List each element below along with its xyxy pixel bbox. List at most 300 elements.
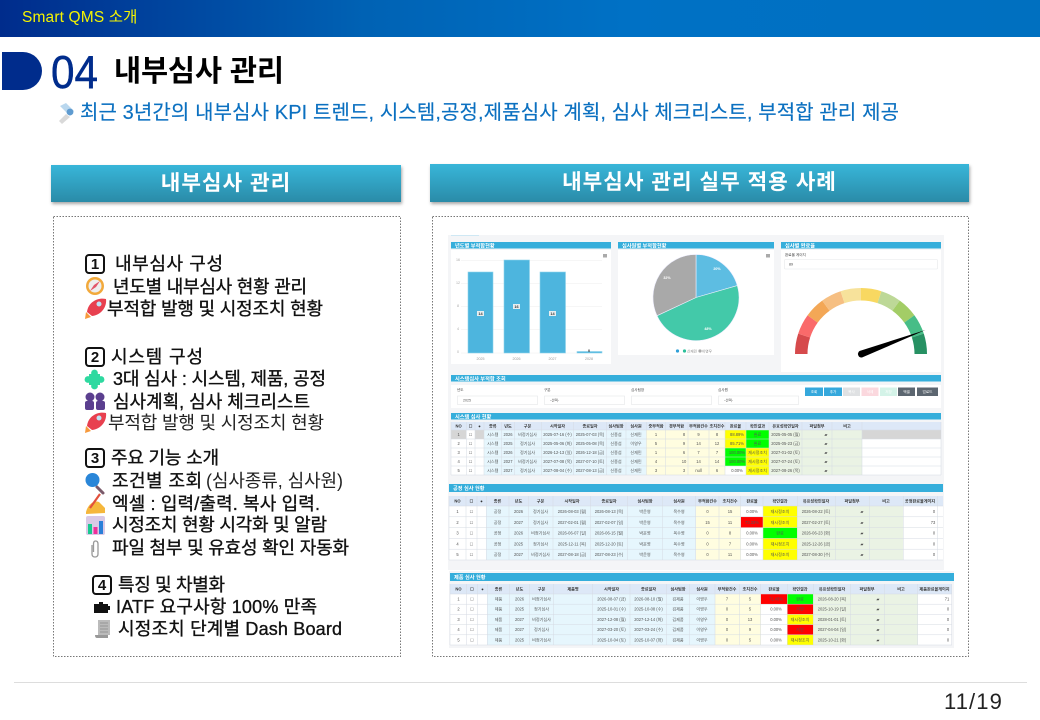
table: process audit status: 박운영 bbox=[639, 508, 651, 514]
table: system audit status: 14 bbox=[696, 459, 701, 464]
table: process audit status: 심사원 bbox=[673, 498, 685, 504]
search filter section: 2025 bbox=[463, 398, 471, 402]
search filter section: 저장 bbox=[885, 389, 892, 394]
search filter section: 년도 bbox=[457, 387, 464, 392]
table: process audit status: 종료일자 bbox=[601, 498, 617, 504]
table: system audit status: 2027-07-08 (목) bbox=[543, 459, 572, 464]
table: product audit status: 5 bbox=[749, 637, 752, 642]
table: process audit status: 2027-08-30 (수) bbox=[802, 551, 831, 557]
table: process audit status: ▰ bbox=[860, 509, 864, 514]
table: process audit status: 4 bbox=[456, 541, 459, 546]
table: process audit status: ● bbox=[480, 498, 483, 504]
table: system audit status: 재시정조치 bbox=[748, 458, 767, 464]
table: process audit status: 0 bbox=[933, 531, 936, 536]
table: product audit status: ▰ bbox=[876, 596, 880, 602]
chart: pie by auditor: 32% bbox=[663, 276, 671, 280]
table: product audit status: 재시정조치 bbox=[791, 616, 810, 622]
search filter section: 심사원 bbox=[718, 387, 728, 392]
table: system audit status: 완료율 bbox=[730, 422, 741, 428]
table: product audit status: 제품 bbox=[495, 636, 502, 642]
table: product audit status: 2025 bbox=[515, 637, 525, 642]
table: process audit status: 73 bbox=[931, 520, 936, 525]
table: process audit status: 부적합건수 bbox=[698, 498, 717, 504]
chart: yearly nonconformity bars: 2025 bbox=[476, 357, 484, 361]
table: product audit status: 5 bbox=[749, 596, 752, 602]
table: product audit status: 지연 bbox=[796, 606, 804, 612]
group 2: system composition: 부적합 발행 및 시정조치 현황 bbox=[108, 413, 324, 433]
table: system audit status: 재시정조치 bbox=[748, 449, 767, 455]
table: system audit status: 비정기심사 bbox=[518, 458, 537, 464]
table: system audit status: 비정기심사 bbox=[518, 431, 537, 437]
top header band bbox=[0, 0, 1040, 37]
search filter section: 시스템심사 부적합 조회 bbox=[455, 374, 506, 382]
table: product audit status: 김제품 bbox=[672, 626, 684, 632]
table: product audit status: 2025 bbox=[515, 607, 525, 612]
table: process audit status: 11 bbox=[728, 552, 733, 557]
group 4: features and differentiators bbox=[93, 575, 342, 639]
table: process audit status: ☐ bbox=[470, 498, 474, 504]
table: process audit status: 박운영 bbox=[639, 551, 651, 557]
table: product audit status: 7 bbox=[726, 596, 729, 602]
table: system audit status: 1 bbox=[457, 432, 460, 437]
table: system audit status: 8 bbox=[683, 432, 686, 437]
table: process audit status: 2026-08-03 (월) bbox=[558, 508, 587, 514]
table: product audit status: 이영우 bbox=[696, 636, 708, 642]
table: product audit status: 시작일자 bbox=[604, 586, 619, 592]
table: process audit status: 구분 bbox=[537, 498, 544, 504]
table: product audit status: 71.43% bbox=[769, 596, 783, 602]
table: system audit status: 완료 bbox=[754, 431, 761, 437]
chart: yearly nonconformity bars: 14 bbox=[478, 312, 483, 316]
table: system audit status: 시스템 심사 현황 bbox=[455, 412, 492, 420]
table: product audit status: 2026 bbox=[515, 596, 525, 602]
table: system audit status: 2027 bbox=[503, 468, 513, 473]
table: system audit status: ☐ bbox=[469, 450, 473, 455]
chart: pie by auditor: 20% bbox=[713, 267, 721, 271]
table: product audit status: 9 bbox=[749, 627, 752, 632]
table: system audit status: 100.00% bbox=[729, 450, 745, 455]
table: system audit status: ▰ bbox=[824, 468, 828, 473]
table: process audit status: 2026 bbox=[514, 531, 524, 536]
table: process audit status: 2025-12-11 (목) bbox=[558, 541, 587, 546]
table: system audit status: 2027-08-26 (목) bbox=[771, 468, 800, 473]
table: process audit status: 2027-02-27 (토) bbox=[802, 520, 831, 525]
table: process audit status: 8 bbox=[729, 531, 732, 536]
table: system audit status: 시스템 bbox=[487, 467, 499, 473]
table: system audit status: 부적합건수 bbox=[689, 422, 708, 428]
table: process audit status: 2025 bbox=[514, 541, 524, 546]
table: system audit status: 5 bbox=[655, 441, 658, 446]
table: process audit status: 2 bbox=[456, 520, 459, 525]
table: system audit status: 시작일자 bbox=[550, 422, 565, 428]
table: product audit status: 김제품 bbox=[672, 596, 684, 602]
table: product audit status: 재시정조치 bbox=[791, 636, 810, 642]
table: product audit status: ▰ bbox=[876, 607, 880, 612]
search filter section: 삭제 bbox=[867, 389, 873, 394]
group 3: main functions: 시정조치 현황 시각화 및 알람 bbox=[112, 515, 327, 535]
left panel heading: 내부심사 관리 bbox=[161, 171, 291, 195]
table: system audit status: 종료일자 bbox=[582, 422, 598, 428]
table: process audit status: 0.00% bbox=[746, 531, 758, 536]
table: process audit status: 2026-06-07 (일) bbox=[558, 530, 587, 536]
table: process audit status: 공정 심사 현황 bbox=[453, 484, 485, 492]
table: product audit status: 0 bbox=[726, 637, 729, 642]
search filter section: 업로드 bbox=[923, 389, 933, 394]
table: product audit status: 2025-10-04 (토) bbox=[597, 637, 626, 642]
table: product audit status: 2025-10-08 (수) bbox=[634, 606, 663, 612]
table: system audit status: ● bbox=[478, 424, 481, 428]
chart: yearly nonconformity bars: 16 bbox=[456, 258, 460, 262]
table: system audit status: 2025-07-16 (수) bbox=[543, 431, 572, 437]
table: system audit status: 14 bbox=[715, 459, 720, 464]
table: product audit status: 이영우 bbox=[696, 596, 708, 602]
table: process audit status: 비정기심사 bbox=[531, 551, 550, 557]
table: product audit status: 2027 bbox=[515, 617, 525, 622]
table: product audit status bbox=[449, 571, 954, 648]
table: process audit status: 2027-08-23 (수) bbox=[595, 551, 624, 557]
table: process audit status: 재시정조치 bbox=[771, 508, 790, 514]
table: product audit status: 확인결과 bbox=[792, 586, 808, 592]
table: product audit status: 2028-01-01 (토) bbox=[818, 617, 847, 622]
table: system audit status: 신재민 bbox=[630, 449, 642, 455]
table: process audit status: ☐ bbox=[470, 531, 474, 536]
table: product audit status: 2026-08-10 (월) bbox=[634, 596, 663, 602]
table: product audit status: 김제품 bbox=[672, 616, 684, 622]
table: system audit status: ▰ bbox=[824, 432, 828, 437]
table: process audit status: 공정 bbox=[494, 530, 501, 536]
table: product audit status: ▰ bbox=[876, 637, 880, 642]
table: system audit status: ▰ bbox=[824, 459, 828, 464]
table: product audit status: 심사원 bbox=[696, 586, 708, 592]
table: process audit status: 15 bbox=[728, 509, 733, 514]
table: process audit status: 2026-06-23 (화) bbox=[802, 530, 831, 536]
table: product audit status: 2026-08-20 (목) bbox=[818, 596, 847, 602]
chart: yearly nonconformity bars: 2028 bbox=[585, 357, 593, 361]
table: process audit status: 0 bbox=[706, 509, 709, 514]
table: system audit status: 비고 bbox=[843, 422, 851, 428]
table: system audit status: 85.71% bbox=[730, 441, 744, 446]
table: process audit status: 시작일자 bbox=[564, 498, 580, 504]
table: system audit status: 이영우 bbox=[630, 440, 642, 446]
table: process audit status: ☐ bbox=[470, 520, 474, 525]
group 1: internal audit composition bbox=[85, 254, 323, 319]
group 3: main functions: 파일 첨부 및 유효성 확인 자동화 bbox=[112, 538, 349, 558]
table: system audit status: 중부적합 bbox=[648, 422, 664, 428]
table: system audit status: 2026 bbox=[503, 432, 513, 437]
chart: pie by auditor: 신재민 bbox=[687, 348, 697, 354]
table: product audit status: 유효성확인일자 bbox=[819, 586, 845, 592]
search filter section: 구분 bbox=[544, 387, 551, 392]
table: product audit status: 2027-04-04 (일) bbox=[818, 626, 847, 632]
table: process audit status: 목수영 bbox=[673, 519, 685, 525]
table: system audit status: 5 bbox=[457, 468, 460, 473]
table: process audit status: NO bbox=[454, 498, 461, 504]
group 4: features and differentiators: 특징 및 차별화 bbox=[118, 575, 225, 595]
table: product audit status: 13 bbox=[748, 617, 753, 622]
table: product audit status: 0 bbox=[726, 627, 729, 632]
table: system audit status: 신재민 bbox=[630, 431, 642, 437]
table: product audit status: 2 bbox=[457, 607, 460, 612]
table: product audit status: 파일첨부 bbox=[859, 586, 875, 592]
table: process audit status: 2027-02-07 (일) bbox=[595, 519, 624, 525]
table: process audit status: ▰ bbox=[860, 552, 864, 557]
table: product audit status: 제품 bbox=[495, 596, 502, 602]
group 4: features and differentiators: 시정조치 단계별 Dash Board bbox=[118, 619, 342, 639]
table: product audit status: 조치건수 bbox=[742, 586, 758, 592]
group 1: internal audit composition: 년도별 내부심사 현황 관리 bbox=[113, 277, 307, 297]
table: system audit status: 심사팀장 bbox=[608, 422, 624, 428]
table: system audit status: 3 bbox=[457, 450, 460, 455]
group 3: main functions: (심사종류, 심사원) bbox=[206, 471, 343, 491]
table: system audit status: 8 bbox=[716, 432, 719, 437]
search filter section: 추가 bbox=[830, 389, 837, 394]
table: process audit status: 0 bbox=[933, 541, 936, 546]
chart: completion gauge: 완료율 게이지 bbox=[785, 252, 806, 257]
table: process audit status: 공정 bbox=[494, 540, 501, 546]
table: system audit status: 2025-05-06 (화) bbox=[543, 440, 572, 446]
table: process audit status: 박운영 bbox=[639, 540, 651, 546]
table: system audit status: 100.00% bbox=[729, 459, 745, 464]
table: process audit status: 정기심사 bbox=[533, 508, 548, 514]
table: product audit status: 제품명 bbox=[567, 586, 579, 592]
table: system audit status: 2025-07-03 (목) bbox=[576, 432, 605, 437]
table: process audit status: 73.33% bbox=[745, 520, 759, 525]
table: system audit status: 시스템 bbox=[487, 449, 499, 455]
search filter section: -선택- bbox=[724, 398, 734, 402]
table: product audit status: 2026-08-07 (금) bbox=[597, 596, 626, 602]
table: system audit status: 9 bbox=[683, 441, 686, 446]
table: process audit status: 박운영 bbox=[639, 519, 651, 525]
table: product audit status: 0 bbox=[726, 617, 729, 622]
table: process audit status: 재시정조치 bbox=[771, 540, 790, 546]
table: process audit status: ▰ bbox=[860, 531, 864, 536]
panel: right application example bbox=[432, 216, 969, 657]
table: system audit status: 2027 bbox=[503, 459, 513, 464]
chart: yearly nonconformity bars: 12 bbox=[456, 281, 460, 285]
group 2: system composition: 시스템 구성 bbox=[111, 347, 203, 367]
table: process audit status: 15 bbox=[705, 520, 710, 525]
table: system audit status: ▰ bbox=[824, 441, 828, 446]
table: system audit status: 신종섭 bbox=[610, 467, 622, 473]
table: system audit status: 12 bbox=[715, 441, 720, 446]
group 3: main functions: 주요 기능 소개 bbox=[111, 448, 219, 468]
table: system audit status: 시스템 bbox=[487, 458, 499, 464]
table: system audit status: 2027-08-13 (금) bbox=[576, 468, 605, 473]
group 2: system composition: 2 bbox=[91, 349, 99, 366]
page number: 11/19 bbox=[944, 689, 1003, 714]
table: system audit status: 2 bbox=[457, 441, 460, 446]
search filter section: 복사 bbox=[848, 389, 855, 394]
table: product audit status: 2025-10-19 (일) bbox=[818, 606, 847, 612]
table: process audit status: ▰ bbox=[860, 520, 864, 525]
table: product audit status: 지연 bbox=[796, 626, 804, 632]
table: process audit status: 0 bbox=[933, 552, 936, 557]
table: system audit status: 3 bbox=[683, 468, 686, 473]
table: process audit status: 0 bbox=[933, 509, 936, 514]
table: product audit status: NO bbox=[455, 586, 462, 592]
table: process audit status: 비정기심사 bbox=[531, 530, 550, 536]
group 3: main functions: 3 bbox=[91, 450, 99, 467]
group 4: features and differentiators: 4 bbox=[98, 577, 107, 594]
table: system audit status: 신종섭 bbox=[610, 458, 622, 464]
right panel heading: 내부심사 관리 실무 적용 사례 bbox=[562, 170, 837, 194]
table: system audit status: 신종섭 bbox=[610, 440, 622, 446]
table: product audit status: 0.00% bbox=[770, 627, 782, 632]
chart: pie by auditor: 심사원별 부적합현황 bbox=[622, 241, 667, 249]
table: system audit status: 1 bbox=[655, 450, 658, 455]
table: product audit status: ☐ bbox=[470, 596, 474, 602]
table: system audit status: 2026-12-18 (금) bbox=[576, 450, 605, 455]
table: process audit status: 11 bbox=[728, 520, 733, 525]
section marker shape bbox=[2, 52, 42, 90]
table: system audit status: 정기심사 bbox=[520, 467, 535, 473]
table: product audit status: 0.00% bbox=[770, 617, 782, 622]
table: process audit status: 정기심사 bbox=[533, 519, 548, 525]
table: process audit status: 박운영 bbox=[639, 530, 651, 536]
table: system audit status: 조치건수 bbox=[709, 422, 725, 428]
right panel heading bbox=[430, 164, 969, 202]
table: product audit status: ▰ bbox=[876, 627, 880, 632]
table: process audit status: 2025-12-20 (토) bbox=[595, 541, 624, 546]
table: product audit status: 0 bbox=[947, 607, 950, 612]
table: product audit status: ☐ bbox=[470, 637, 474, 642]
table: system audit status: ☐ bbox=[469, 468, 473, 473]
table: process audit status: 2026-06-15 (월) bbox=[595, 530, 624, 536]
chart: yearly nonconformity bars: 16 bbox=[514, 305, 519, 309]
table: system audit status: 파일첨부 bbox=[809, 422, 825, 428]
table: system audit status: NO bbox=[456, 424, 462, 428]
table: process audit status: 0 bbox=[706, 531, 709, 536]
table: product audit status: 종료일자 bbox=[641, 586, 656, 592]
table: product audit status: 비고 bbox=[897, 586, 905, 592]
table: product audit status: 2027-12-08 (월) bbox=[597, 616, 626, 622]
table: process audit status: 유효성확인일자 bbox=[803, 498, 829, 504]
table: product audit status: 심사팀장 bbox=[670, 586, 686, 592]
table: system audit status: 3 bbox=[655, 468, 658, 473]
table: product audit status: 5 bbox=[749, 607, 752, 612]
table: process audit status: 정기심사 bbox=[533, 540, 548, 546]
table: product audit status: 제품 심사 현황 bbox=[454, 573, 486, 581]
table: system audit status: 88.89% bbox=[730, 432, 744, 437]
table: product audit status: 0 bbox=[726, 607, 729, 612]
table: process audit status: 2027 bbox=[514, 552, 524, 557]
table: product audit status: 김제품 bbox=[672, 636, 684, 642]
table: process audit status: ☐ bbox=[470, 541, 474, 546]
group 3: main functions: 엑셀 : 입력/출력. 복사 입력. bbox=[112, 494, 320, 514]
table: system audit status: 2025-05-05 (월) bbox=[771, 431, 800, 437]
table: product audit status: 0 bbox=[947, 627, 950, 632]
table: process audit status: 0 bbox=[706, 541, 709, 546]
table: product audit status: 5 bbox=[457, 637, 460, 642]
table: product audit status: 71 bbox=[945, 596, 950, 602]
table: product audit status: 이영우 bbox=[696, 616, 708, 622]
table: system audit status: 종류 bbox=[489, 422, 497, 428]
table: product audit status: 이영우 bbox=[696, 606, 708, 612]
table: system audit status: ☐ bbox=[469, 432, 473, 437]
chart: yearly nonconformity bars: 8 bbox=[457, 304, 459, 308]
table: system audit status: 2027-08-04 (수) bbox=[543, 467, 572, 473]
table: process audit status: 파일첨부 bbox=[844, 498, 860, 504]
table: process audit status: 공정완료율게이지 bbox=[905, 498, 935, 504]
table: system audit status: 확인결과 bbox=[750, 422, 765, 428]
table: system audit status: 신종섭 bbox=[610, 431, 622, 437]
table: system audit status: 6 bbox=[716, 468, 719, 473]
table: process audit status: 7 bbox=[729, 541, 732, 546]
table: system audit status: 10 bbox=[682, 459, 687, 464]
table: system audit status: null bbox=[695, 468, 702, 473]
dashboard screenshot bbox=[448, 235, 954, 648]
table: process audit status: 확인결과 bbox=[772, 498, 788, 504]
table: process audit status: ☐ bbox=[470, 552, 474, 557]
table: process audit status: 완료 bbox=[776, 530, 784, 536]
search filter section bbox=[451, 374, 941, 408]
table: system audit status: 신종섭 bbox=[610, 449, 622, 455]
table: process audit status: 2027-08-18 (금) bbox=[558, 552, 587, 557]
group 2: system composition: 3대 심사 : 시스템, 제품, 공정 bbox=[113, 369, 326, 389]
table: process audit status: 재시정조치 bbox=[771, 519, 790, 525]
table: process audit status: 재시정조치 bbox=[771, 551, 790, 557]
table: system audit status: 시스템 bbox=[487, 431, 499, 437]
table: process audit status: 공정 bbox=[494, 508, 501, 514]
table: process audit status: 2026-08-22 (토) bbox=[802, 509, 831, 514]
table: process audit status: 비고 bbox=[882, 498, 890, 504]
table: product audit status: 부적합건수 bbox=[718, 586, 737, 592]
table: process audit status: 년도 bbox=[515, 498, 522, 504]
subtitle with bullet: 최근 3년간의 내부심사 KPI 트렌드, 시스템,공정,제품심사 계획, 심사 체크리스트, 부적합 관리 제공 bbox=[80, 101, 899, 124]
table: system audit status: 4 bbox=[655, 459, 658, 464]
table: process audit status: ☐ bbox=[470, 509, 474, 514]
group 2: system composition: 심사계획, 심사 체크리스트 bbox=[113, 392, 310, 412]
table: product audit status: 2025-10-21 (화) bbox=[818, 636, 847, 642]
table: product audit status: 2025-10-07 (화) bbox=[634, 636, 663, 642]
table: product audit status: 김제품 bbox=[672, 606, 684, 612]
table: process audit status: 2026 bbox=[514, 509, 524, 514]
table: process audit status bbox=[449, 484, 943, 560]
table: system audit status: ▰ bbox=[824, 450, 828, 455]
table: process audit status: 2027-02-01 (월) bbox=[558, 519, 587, 525]
table: product audit status: 1 bbox=[457, 596, 460, 602]
group 1: internal audit composition: 내부심사 구성 bbox=[115, 254, 223, 274]
table: process audit status: 5 bbox=[456, 552, 459, 557]
table: product audit status: 0 bbox=[947, 617, 950, 622]
table: system audit status: 2027-07-24 (토) bbox=[771, 459, 800, 464]
table: system audit status: 14 bbox=[696, 441, 701, 446]
search filter section: 심사팀장 bbox=[631, 387, 645, 392]
table: system audit status: 구분 bbox=[524, 422, 531, 428]
search filter section: 엑셀 bbox=[903, 389, 910, 394]
table: process audit status: 목수영 bbox=[673, 540, 685, 546]
table: system audit status: 경부적합 bbox=[669, 422, 684, 428]
table: product audit status: 제품 bbox=[495, 606, 502, 612]
table: system audit status: 7 bbox=[697, 450, 700, 455]
table: system audit status: 시스템 bbox=[487, 440, 499, 446]
table: system audit status: 7 bbox=[716, 450, 719, 455]
chart: yearly nonconformity bars: 2027 bbox=[548, 357, 556, 361]
chart: yearly nonconformity bars: 2026 bbox=[512, 357, 520, 361]
table: process audit status: 공정 bbox=[494, 551, 501, 557]
table: process audit status: 공정 bbox=[494, 519, 501, 525]
chart: yearly nonconformity bars: 4 bbox=[457, 327, 459, 331]
chart: yearly nonconformity bars bbox=[451, 241, 611, 364]
search filter section: 조회 bbox=[811, 389, 817, 394]
chart: completion gauge: 심사별 완료율 bbox=[785, 241, 815, 249]
group 3: main functions bbox=[86, 448, 349, 558]
chart: completion gauge bbox=[781, 241, 941, 372]
table: product audit status: 제품완료율게이지 bbox=[919, 586, 950, 592]
group 1: internal audit composition: 1 bbox=[91, 256, 99, 273]
chart: yearly nonconformity bars: 14 bbox=[550, 312, 555, 316]
table: process audit status: 목수영 bbox=[673, 530, 685, 536]
